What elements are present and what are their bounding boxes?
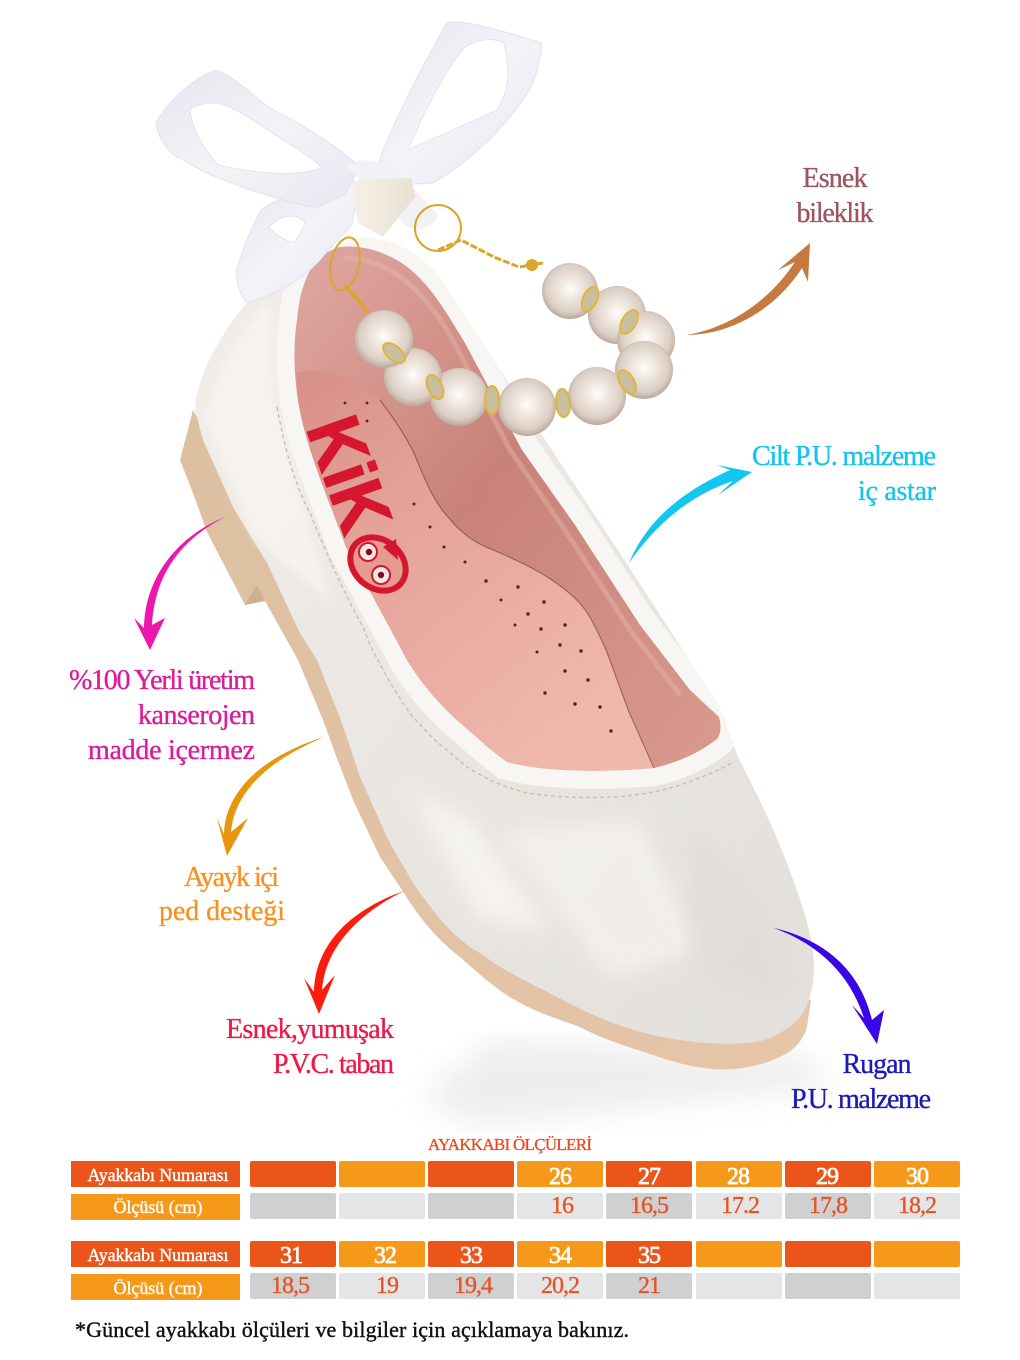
insole logo [291, 406, 421, 606]
footnote: *Güncel ayakkabı ölçüleri ve bilgiler için açıklamaya bakınız. [75, 1317, 629, 1342]
row label: shoe number: Ayakkabı Numarası [88, 1165, 228, 1185]
clasp [526, 259, 538, 271]
label: lining: iç astar [858, 476, 937, 507]
perforation dots [344, 402, 613, 733]
heel notch [245, 585, 265, 605]
number cells: 32 [374, 1243, 396, 1269]
seam stitching [277, 407, 734, 798]
label: local production: %100 Yerli üretim [69, 665, 255, 696]
label: sole: Esnek,yumuşak [226, 1014, 394, 1045]
logo word: KiK [291, 406, 408, 543]
arrow: elastic ankle strap [686, 243, 810, 335]
measure cells: 18,2 [898, 1193, 936, 1219]
measure cells: 20,2 [541, 1273, 579, 1299]
size table heading: AYAKKABI ÖLÇÜLERİ [428, 1135, 592, 1154]
measure cells: 21 [638, 1273, 660, 1299]
rondelles [380, 284, 642, 418]
number cells: 30 [906, 1164, 929, 1190]
row label: measure [71, 1194, 240, 1220]
insole [297, 371, 654, 771]
left chain [345, 285, 368, 312]
number cells [250, 1241, 960, 1269]
upper body [195, 237, 814, 1044]
ribbon tail [236, 177, 358, 303]
pearls [355, 263, 675, 436]
ribbon bow [156, 22, 542, 303]
sole and heel [180, 410, 811, 1069]
number cells: 35 [638, 1243, 661, 1269]
row label: measure [71, 1274, 240, 1300]
number cells: 29 [816, 1164, 839, 1190]
label: elastic ankle strap: Esnek [802, 163, 868, 194]
label: local production: kanserojen [138, 700, 255, 731]
number cells: 34 [549, 1243, 572, 1269]
measure cells: 16 [551, 1193, 574, 1219]
back highlight [205, 300, 330, 600]
label: patent material: Rugan [842, 1049, 912, 1080]
arrow: insole pad [217, 737, 324, 856]
row label: measure: Ölçüsü (cm) [114, 1197, 202, 1218]
collar rim [294, 247, 720, 771]
lining cavity [294, 247, 720, 771]
chain [438, 240, 543, 267]
shoe [180, 237, 814, 1069]
floor shadow under shoe [420, 1040, 840, 1125]
number cells [250, 1161, 960, 1190]
label: lining: Cilt P.U. malzeme [752, 441, 936, 472]
label: elastic ankle strap: bileklik [796, 198, 874, 229]
toe highlights [410, 790, 700, 980]
pearl bracelet [326, 205, 675, 436]
arrow: patent material [774, 928, 884, 1044]
insole seam [380, 400, 654, 768]
measure cells: 18,5 [271, 1273, 310, 1299]
number cells: 33 [460, 1243, 483, 1269]
label: patent material: P.U. malzeme [791, 1084, 931, 1115]
toe shade [690, 830, 795, 998]
measure cells [250, 1193, 960, 1219]
size table: first block [71, 1161, 960, 1220]
right loop [375, 22, 542, 185]
number cells: 27 [638, 1164, 661, 1190]
measure cells [250, 1273, 960, 1299]
right ring [415, 205, 461, 251]
measure cells: 17.2 [721, 1193, 759, 1219]
size table: second block [71, 1241, 960, 1300]
row label: shoe number [71, 1161, 240, 1187]
logo face [335, 522, 421, 606]
number cells: 28 [727, 1164, 750, 1190]
left loop [156, 70, 360, 208]
label: insole pad: Ayayk içi [184, 862, 279, 893]
measure cells: 16,5 [630, 1193, 669, 1219]
label: local production: madde içermez [88, 735, 255, 766]
measure cells: 19 [376, 1273, 399, 1299]
arrow: sole [304, 891, 404, 1014]
plastic clip [351, 178, 415, 237]
left ring [326, 235, 364, 293]
label: insole pad: ped desteği [159, 896, 285, 927]
label: sole: P.V.C. taban [273, 1049, 394, 1080]
arrow: lining [629, 465, 752, 563]
number cells: 26 [549, 1164, 572, 1190]
row label: shoe number [71, 1241, 240, 1267]
measure cells: 17,8 [809, 1193, 848, 1219]
knot [345, 160, 438, 229]
row label: shoe number: Ayakkabı Numarası [88, 1245, 228, 1265]
lining stripe [345, 258, 680, 695]
row label: measure: Ölçüsü (cm) [114, 1278, 202, 1299]
measure cells: 19,4 [454, 1273, 493, 1299]
number cells: 31 [280, 1243, 302, 1269]
arrow: heel [134, 517, 225, 650]
